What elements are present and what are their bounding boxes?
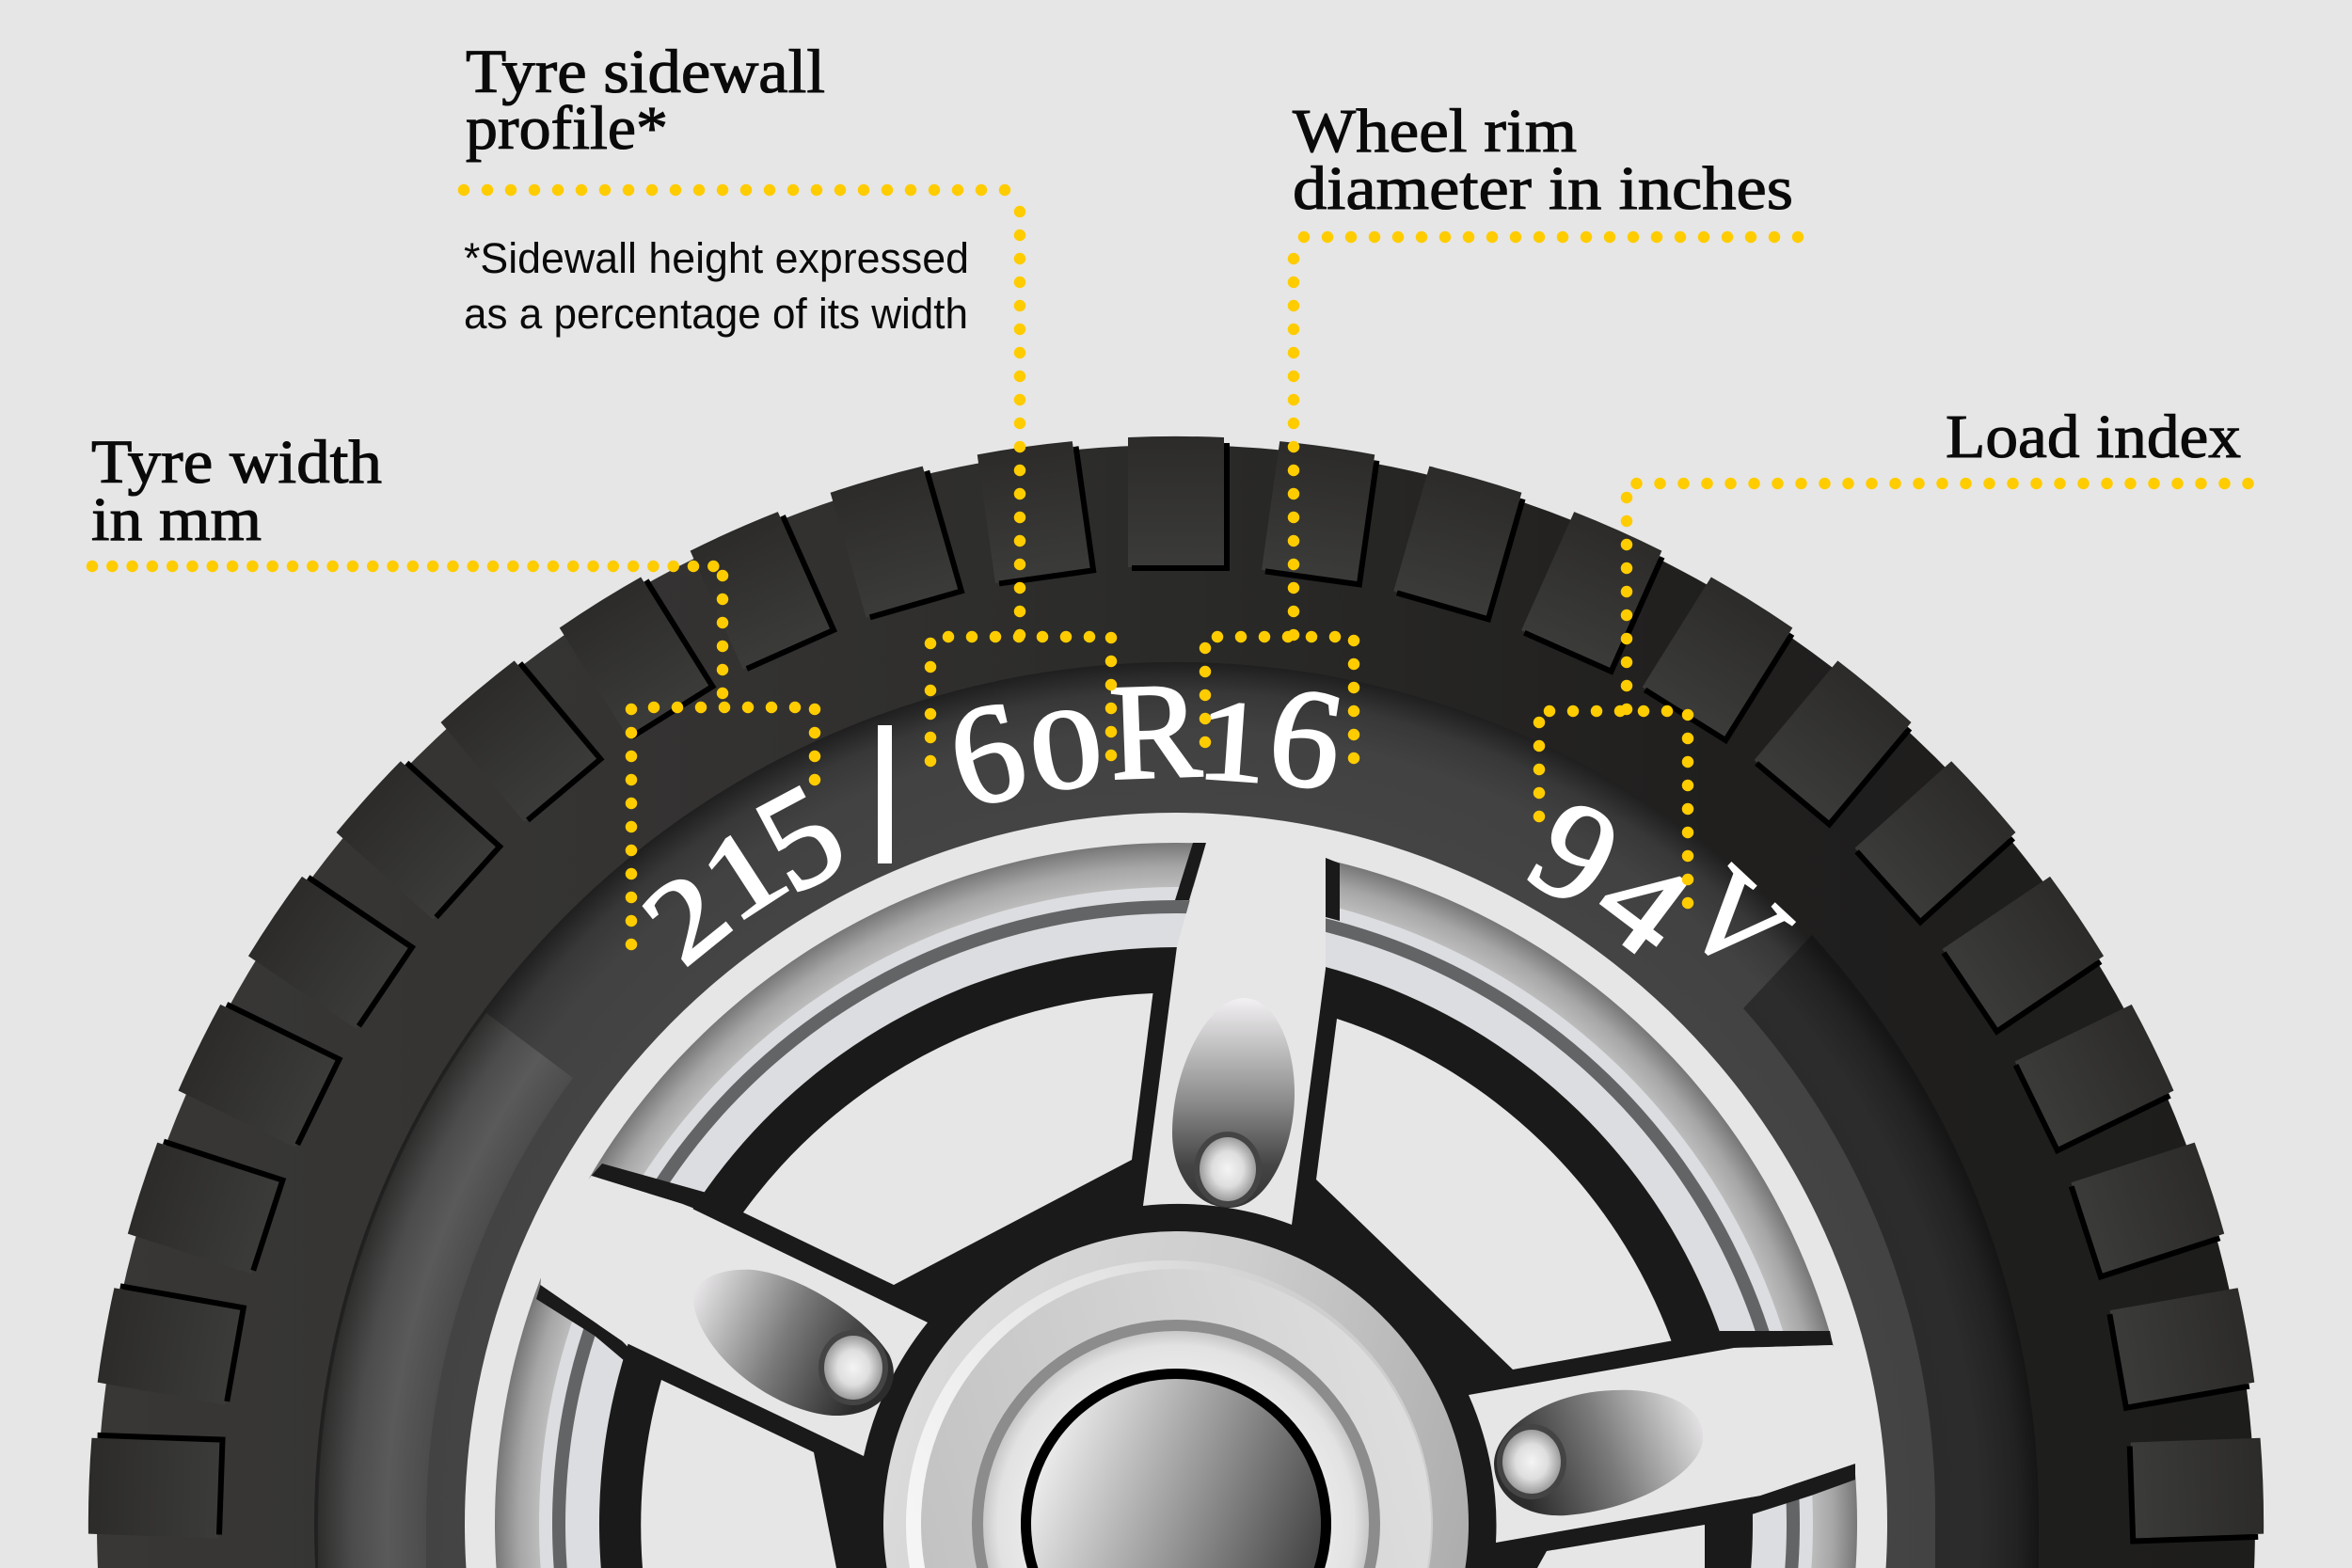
tread lugs (87, 436, 2265, 1542)
label: tyre sidewall profile (466, 38, 825, 163)
load index 94V (1506, 768, 1814, 1002)
tyre sidewall (314, 662, 2038, 1568)
footnote: sidewall height: as a percentage of its width (464, 290, 968, 338)
spoke: left (540, 1176, 928, 1456)
tyre width digits (620, 752, 868, 989)
separator bar (878, 725, 892, 863)
footnote: sidewall height: *Sidewall height expressed (464, 234, 969, 282)
wheel rim (465, 813, 1887, 1568)
bolt pocket: left (693, 1270, 894, 1416)
leader: tyre width (92, 566, 815, 950)
tyre width digits: 1 (678, 800, 808, 945)
profile digits (935, 671, 1110, 838)
rim outer disc (465, 813, 1887, 1568)
hub (883, 1231, 1469, 1568)
sidewall code: 215 | 60R16 94V (620, 655, 1814, 1002)
label: wheel rim diameter: diameter in inches (1293, 154, 1793, 223)
label: wheel rim diameter: Wheel rim (1293, 97, 1577, 166)
label: wheel rim diameter (1293, 97, 1793, 223)
rim code R16 (1107, 655, 1353, 821)
tyre body (97, 445, 2255, 1568)
rim code R16: R (1107, 655, 1203, 809)
leader: load index (1539, 483, 2250, 905)
profile digits: 0 (1022, 682, 1110, 816)
tyre width digits: 5 (732, 752, 868, 924)
sidewall highlight left (318, 1013, 573, 1568)
load index 94V: 4 (1570, 824, 1716, 985)
spoke: right (1469, 1345, 1867, 1543)
sidewall shade right (1743, 935, 2039, 1568)
label: tyre sidewall profile: Tyre sidewall (466, 38, 825, 106)
label: tyre width (91, 428, 382, 554)
leader: wheel rim diameter (1205, 237, 1799, 761)
spoke shadows (536, 843, 1855, 1525)
spoke: top (1143, 832, 1326, 1225)
label: tyre width: Tyre width (91, 428, 382, 497)
rim code R16: 1 (1194, 676, 1271, 808)
load index 94V: 9 (1506, 768, 1645, 938)
label: tyre sidewall profile: profile* (466, 94, 668, 163)
bolt pocket: right (1494, 1390, 1703, 1515)
label: load index: Load index (1946, 403, 2241, 471)
profile digits: 6 (935, 671, 1039, 838)
spoke windows (641, 993, 1705, 1568)
load index 94V: V (1658, 842, 1814, 1002)
rim barrel bands (495, 843, 1857, 1568)
bolt pocket: top (1172, 998, 1295, 1208)
footnote: sidewall height (464, 234, 969, 338)
tyre width digits: 2 (620, 847, 753, 989)
tyre (87, 436, 2265, 1568)
rim code R16: 6 (1259, 656, 1353, 821)
leader: sidewall profile (464, 190, 1111, 764)
label: tyre width: in mm (91, 485, 262, 554)
